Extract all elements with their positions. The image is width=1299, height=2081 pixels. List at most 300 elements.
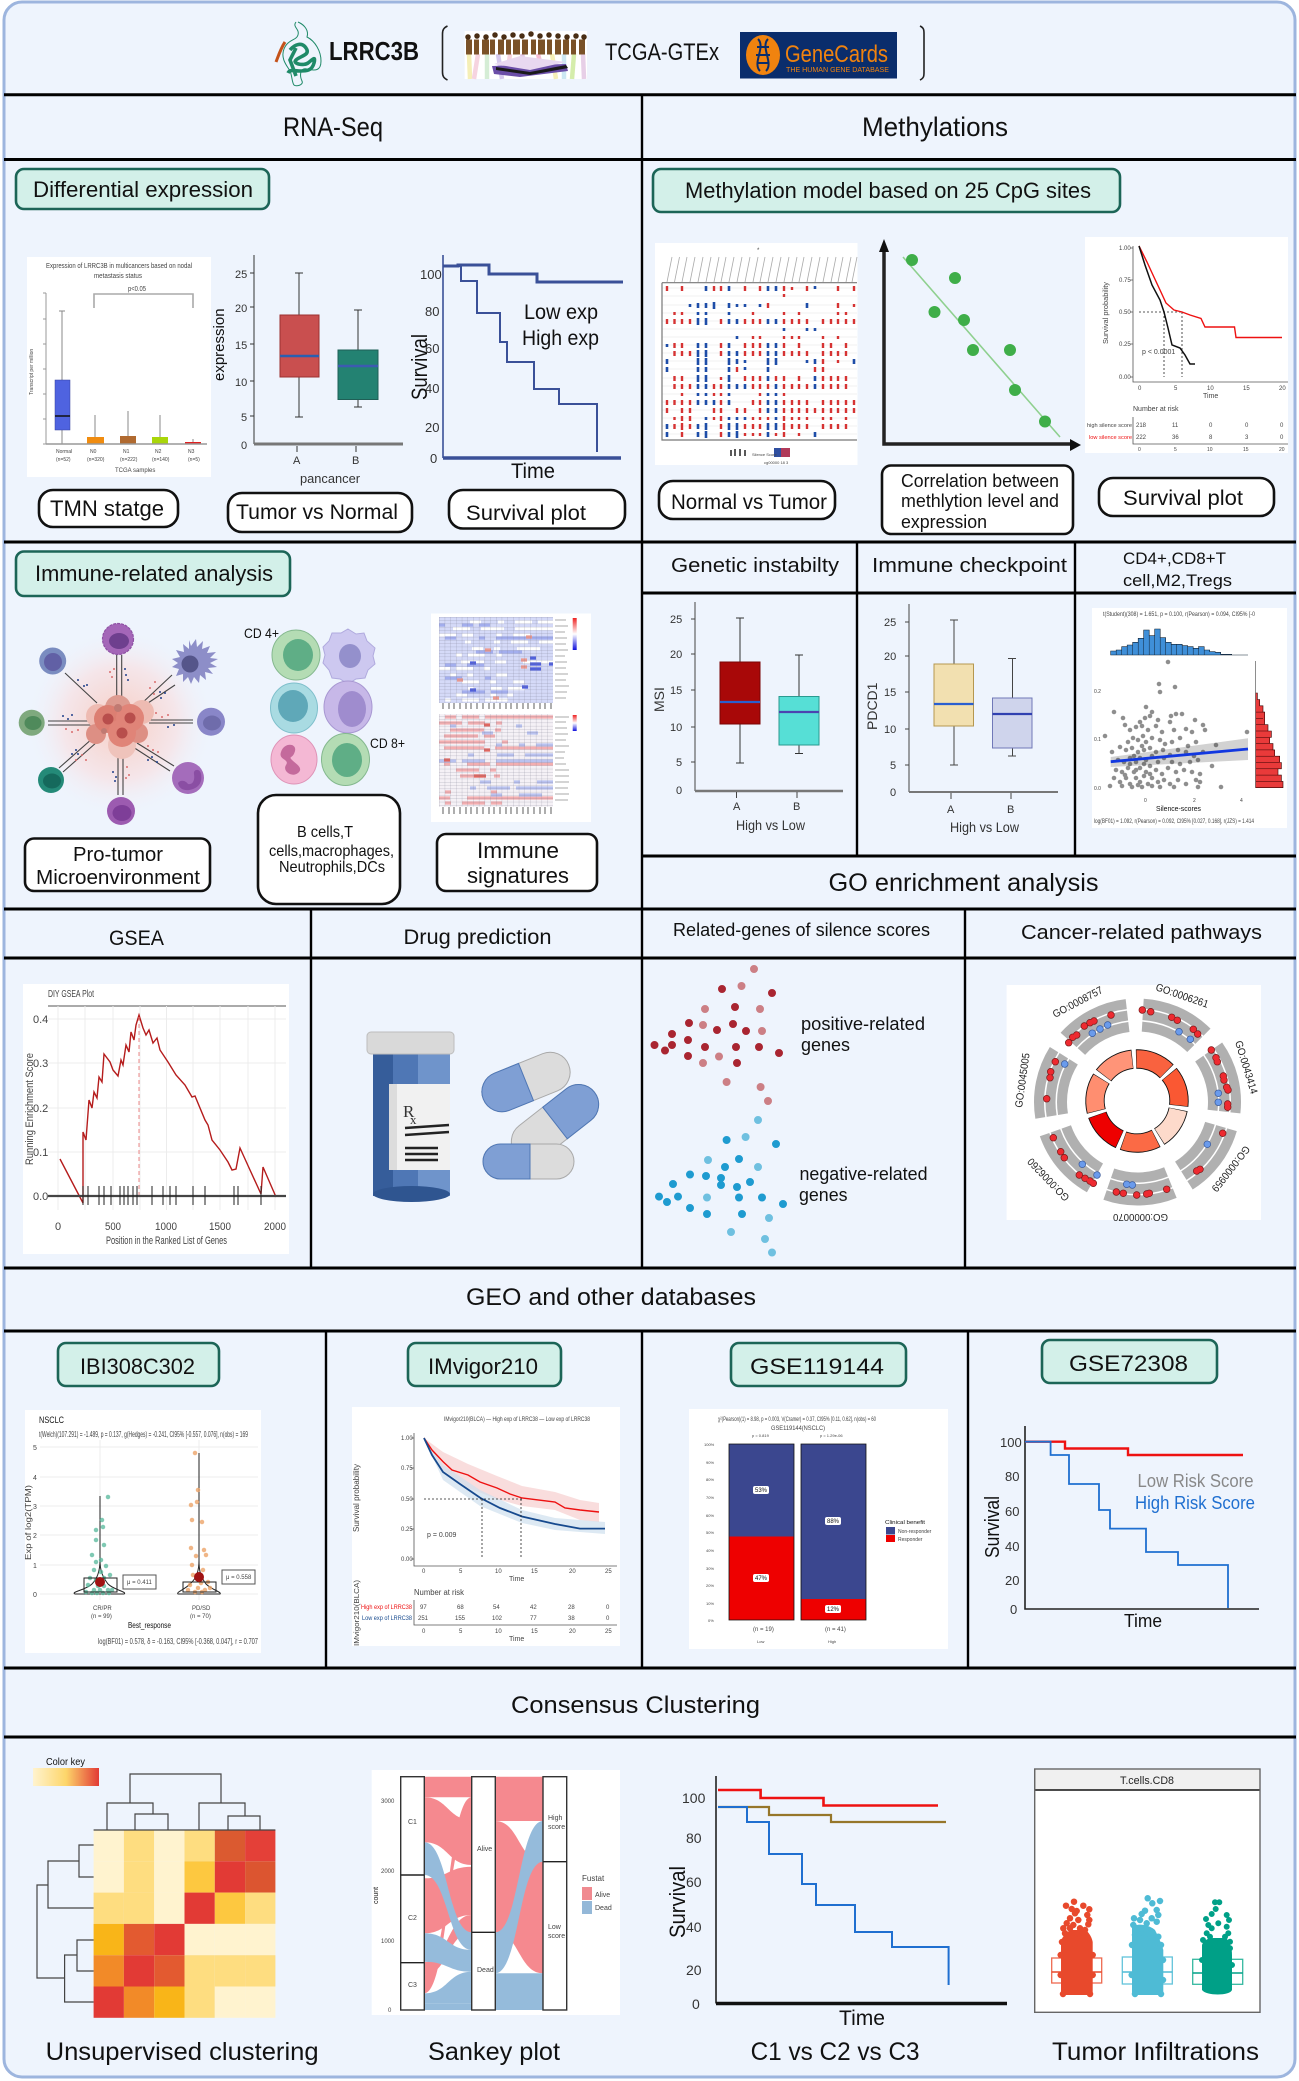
chart: IMvigor210 survival: 54	[493, 1605, 500, 1611]
chart: IMvigor210 survival: 0.75	[401, 1466, 413, 1472]
chart: GSE119144 stacked bars	[689, 1409, 948, 1649]
chart: IMvigor210 survival: 0.25	[401, 1527, 413, 1533]
chart: methylation survival: 15	[1243, 447, 1249, 453]
label: CD 4+: CD 4+	[244, 625, 279, 641]
chart: GSE72308 survival: Time	[1124, 1611, 1162, 1631]
label: Survival plot methylation: Survival plot	[1123, 487, 1243, 510]
left bracket	[442, 26, 448, 80]
chart: Sankey plot: C1	[408, 1819, 417, 1826]
chart: MSI box plot: 25	[670, 614, 682, 626]
chart: silence score scatter: 2	[1193, 798, 1196, 804]
chart: GSE72308 survival: 100	[1000, 1435, 1022, 1450]
badge: GSE72308	[1042, 1340, 1217, 1383]
chart: GSE119144 stacked bars: 90%	[706, 1460, 714, 1465]
chart: IMvigor210 survival: Low exp of LRRC38	[362, 1616, 413, 1622]
chart: PDCD1 box plot: B	[1007, 804, 1014, 816]
chart: MSI box plot: B	[793, 801, 800, 813]
chart: violin plot NSCLC: t(Welch)(107.291) = -1.489, p = 0.137, g(Hedges) = -0.241, CI95% [-0.557, 0.076], n(obs) = 169	[39, 1430, 248, 1439]
chart: Sankey plot: Low	[548, 1924, 562, 1931]
chart: GSE119144 stacked bars: (n = 19)	[753, 1627, 774, 1633]
chart: Sankey plot: score	[548, 1933, 565, 1940]
chart: C1 vs C2 vs C3 survival: 100	[682, 1790, 706, 1806]
satellite cells	[19, 624, 225, 825]
chart: GSE119144 stacked bars: χ²(Pearson)(1) = 8.98, p = 0.003, V(Cramer) = 0.37, CI95% [0.11, 0.62], n(obs) = 60	[718, 1417, 876, 1423]
chart: GSE119144 stacked bars: 70%	[706, 1495, 714, 1500]
label: Immune signatures: Immune	[477, 838, 559, 863]
label: Survival plot: Survival plot	[466, 502, 586, 525]
chart: violin plot NSCLC: log(BF01) = 0.578, δ = -0.163, CI95% [-0.368, 0.047], r = 0.707	[98, 1637, 258, 1646]
chart: GSE119144 stacked bars: 50%	[706, 1530, 714, 1535]
chart: GSEA plot: Running Enrichment Score	[24, 1053, 36, 1165]
chart: MSI box plot: 15	[670, 685, 682, 697]
chart: IMvigor210 survival: IMvigor210(BLCA) — High exp of LRRC38 — Low exp of LRRC38	[444, 1417, 591, 1423]
chart: PDCD1 box plot: 25	[884, 617, 896, 629]
label: Normal vs Tumor: Normal vs Tumor	[671, 491, 827, 514]
chart: IMvigor210 survival: IMvigor210(BLCA)	[354, 1580, 361, 1646]
chart: survival plot RNA-seq: 80	[425, 304, 439, 319]
network: negative-related genes: genes	[799, 1185, 848, 1205]
chart: methylation survival: high silence score	[1087, 423, 1132, 429]
tumor cluster	[86, 695, 154, 759]
chart: GSE119144 stacked bars: 40%	[706, 1548, 714, 1553]
chart: violin plot NSCLC: Exp of log2(TPM)	[24, 1485, 33, 1560]
chart: IMvigor210 survival: 15	[531, 1629, 538, 1635]
chart: methylation heatmap dots	[655, 243, 858, 465]
label: Correlation	[882, 466, 1073, 534]
chart: IMvigor210 survival: Number at risk	[414, 1588, 465, 1597]
heading: CD4 CD8	[1123, 549, 1232, 590]
chart: C1 vs C2 vs C3 survival: Time	[839, 2007, 885, 2030]
icon: pill bottle and capsules: R	[403, 1102, 415, 1121]
chart: PDCD1 box plot: 5	[890, 760, 896, 772]
chart: methylation survival: 0	[1138, 386, 1142, 392]
badge: GSE72308: GSE72308	[1069, 1351, 1188, 1376]
chart: IMvigor210 survival: 251	[418, 1616, 429, 1622]
chart: methylation survival: 20	[1279, 447, 1285, 453]
heading: RNA-Seq: RNA-Seq	[283, 112, 383, 142]
chart: tumor vs normal box plot: pancancer	[300, 471, 361, 486]
chart: GSEA plot: 2000	[264, 1221, 286, 1233]
chart: violin plot NSCLC: (n = 70)	[190, 1614, 211, 1620]
heading: Related-genes: Related-genes of silence scores	[673, 920, 930, 940]
chart: methylation heatmap dots: Silence Score	[752, 452, 777, 457]
network: positive-related genes: positive-related	[801, 1014, 925, 1034]
gene name: LRRC3B	[329, 36, 419, 66]
label: Pro-tumor Microenvironment: Pro-tumor	[73, 844, 163, 866]
badge: Methylation model: Methylation model based on 25 CpG sites	[685, 178, 1091, 203]
heading: CD4 CD8: cell,M2,Tregs	[1123, 571, 1232, 590]
heading: GSEA: GSEA	[109, 927, 164, 950]
chart: GSE119144 stacked bars: 12%	[827, 1607, 840, 1613]
chart: PDCD1 box plot: PDCD1	[864, 682, 880, 730]
chart: GSEA plot: Position in the Ranked List of Genes	[106, 1235, 227, 1247]
label: Unsupervised clustering: Unsupervised clustering	[46, 2038, 319, 2066]
chart: GSE119144 stacked bars: 0%	[708, 1618, 714, 1623]
chart: violin plot NSCLC: (n = 99)	[91, 1614, 112, 1620]
chart: GSE119144 stacked bars: 30%	[706, 1566, 714, 1571]
chart: GSE119144 stacked bars: Clinical benefit	[885, 1520, 926, 1526]
diagram: pro-tumor microenvironment	[19, 624, 225, 825]
chart: methylation survival: 3	[1245, 435, 1249, 441]
chart: Sankey plot: C3	[408, 1982, 417, 1989]
badge: IBI308C302	[58, 1343, 219, 1386]
chart: GSE72308 survival: Survival	[982, 1496, 1004, 1558]
heading: Cancer-related pathways: Cancer-related pathways	[1021, 922, 1262, 944]
chart: PDCD1 box plot: 20	[884, 651, 896, 663]
chart: silence score scatter	[1092, 608, 1287, 828]
chart: survival plot RNA-seq: 60	[425, 341, 439, 356]
chart: tumor vs normal box plot: expression	[211, 308, 228, 381]
chart: IMvigor210 survival: 0.50	[401, 1497, 413, 1503]
chart: GSE119144 stacked bars: Non-responder	[898, 1529, 932, 1535]
chart: survival plot RNA-seq: 0	[430, 451, 437, 466]
chart: TMN stage box plot: p<0.05	[128, 286, 146, 293]
chart: TMN stage box plot	[27, 257, 211, 477]
heading: CD4 CD8: CD4+,CD8+T	[1123, 549, 1226, 568]
chart: Sankey plot: Alive	[595, 1892, 610, 1899]
label: CD 8+: CD 8+	[370, 735, 405, 751]
chart: IMvigor210 survival: 1.00	[401, 1436, 413, 1442]
chart: silence score scatter: log(BF01) = 1.092, r(Pearson) = 0.092, CI95% [0.027, 0.168], r(JZS) = 1.414	[1094, 819, 1255, 825]
chart: survival plot RNA-seq: High exp	[522, 327, 599, 350]
chart: TMN stage box plot: Normal	[56, 449, 72, 455]
chart: IMvigor210 survival: 42	[530, 1605, 537, 1611]
network: positive-related genes	[654, 969, 925, 1101]
chart: MSI box plot: MSI	[651, 687, 667, 712]
chart: methylation survival: Number at risk	[1133, 406, 1179, 413]
chart: methylation survival: 0	[1280, 423, 1284, 429]
chart: PDCD1 box plot: 0	[890, 787, 896, 799]
chart: Sankey plot: 3000	[381, 1799, 395, 1805]
network: negative-related genes: negative-related	[800, 1164, 928, 1184]
chart: IMvigor210 survival: p = 0.009	[427, 1532, 456, 1539]
chart: PDCD1 box plot: 15	[884, 687, 896, 699]
badge: IBI308C302: IBI308C302	[80, 1354, 195, 1379]
label: Survival plot methylation	[1099, 478, 1274, 516]
chart: TMN stage box plot: Transcript per million	[29, 349, 35, 395]
badge: IMvigor210: IMvigor210	[428, 1354, 538, 1379]
header: data sources	[276, 22, 924, 86]
badge: Differential expression	[16, 169, 269, 209]
chart: TMN stage box plot: N3	[188, 449, 195, 455]
chart: IMvigor210 survival: 38	[568, 1616, 575, 1622]
label: B cells T cells: B cells,T	[297, 824, 353, 841]
chart: correlation scatter	[879, 239, 1081, 451]
chart: silence score scatter: 0.0	[1094, 786, 1101, 792]
chart: Sankey plot: Fustat	[582, 1874, 605, 1883]
chart: circular GO plot: GO:0000959	[1209, 1143, 1252, 1194]
label: Correlation: Correlation between	[901, 471, 1059, 491]
chart: violin plot NSCLC: 5	[33, 1445, 37, 1452]
badge: Differential expression: Differential expression	[33, 177, 253, 202]
chart: methylation survival: 0	[1138, 447, 1141, 453]
label: Pro-tumor Microenvironment: Microenvironment	[36, 867, 200, 889]
icon: LRRC3B protein	[276, 22, 321, 86]
label: B cells T cells: cells,macrophages,	[269, 843, 394, 860]
chart: TMN stage box plot: N0	[90, 449, 97, 455]
label: TMN statge: TMN statge	[50, 496, 164, 521]
chart: Sankey plot: Alive	[477, 1846, 492, 1853]
chart: methylation survival: 222	[1136, 435, 1147, 441]
chart: IMvigor210 survival: Time	[509, 1576, 524, 1583]
label: Sankey plot: Sankey plot	[428, 2038, 560, 2066]
chart: survival plot RNA-seq: 40	[425, 381, 439, 396]
chart: C1 vs C2 vs C3 survival: 0	[692, 1996, 700, 2012]
chart: silence score scatter: 0.1	[1094, 737, 1101, 743]
chart: methylation survival	[1085, 237, 1288, 453]
chart: IMvigor210 survival: 97	[420, 1605, 427, 1611]
chart: GSEA plot: 0.3	[33, 1058, 48, 1070]
chart: Sankey plot: Dead	[595, 1905, 612, 1912]
chart: IMvigor210 survival: 20	[569, 1569, 576, 1575]
chart: Sankey plot: 0	[388, 2008, 392, 2014]
heading: Genetic instabilty: Genetic instabilty	[671, 555, 839, 577]
chart: methylation survival: 36	[1172, 435, 1179, 441]
chart: IMvigor210 survival: 77	[530, 1616, 537, 1622]
chart: violin plot NSCLC: μ = 0.411	[127, 1580, 153, 1586]
chart: GSEA plot: 0.2	[33, 1103, 48, 1115]
chart: methylation survival: 5	[1174, 447, 1177, 453]
chart: MSI box plot: 5	[676, 757, 682, 769]
label: Correlation: expression	[901, 512, 987, 532]
chart: MSI box plot: 0	[676, 785, 682, 797]
chart: tumor vs normal box plot: 5	[241, 412, 247, 424]
chart: methylation survival: p < 0.0001	[1142, 349, 1175, 356]
chart: IMvigor210 survival: 10	[495, 1569, 502, 1575]
label: Tumor vs Normal	[228, 493, 412, 532]
chart: IMvigor210 survival: High exp of LRRC38	[361, 1605, 413, 1611]
chart: Sankey plot: High	[548, 1815, 563, 1822]
chart: GSE119144 stacked bars: (n = 41)	[825, 1627, 846, 1633]
chart: C1 vs C2 vs C3 survival: 60	[686, 1874, 702, 1890]
chart: silence score scatter: 4	[1240, 798, 1243, 804]
chart: tumor vs normal box plot: 20	[235, 303, 247, 315]
chart: survival plot RNA-seq: 100	[420, 267, 442, 282]
chart: GSEA plot: 500	[105, 1221, 121, 1233]
chart: GSEA plot: 1500	[209, 1221, 231, 1233]
chart: immune signatures heatmaps	[431, 614, 591, 822]
chart: IMvigor210 survival	[352, 1407, 620, 1646]
chart: methylation survival: 11	[1172, 423, 1179, 429]
chart: methylation heatmap dots: *	[757, 248, 760, 254]
chart: methylation survival: 0.50	[1119, 310, 1131, 316]
chart: silence score scatter: 0	[1144, 798, 1147, 804]
chart: GSE119144 stacked bars: GSE119144(NSCLC)	[771, 1426, 825, 1432]
chart: violin plot NSCLC: PD/SD	[192, 1606, 211, 1612]
chart: GSE119144 stacked bars: Low	[757, 1639, 764, 1644]
chart: silence score scatter: Silence-scores	[1156, 806, 1201, 813]
chart: tumor vs normal box plot: 15	[235, 340, 247, 352]
badge: Immune-related analysis	[16, 552, 290, 596]
chart: T cells CD8 infiltration: T.cells.CD8	[1120, 1775, 1174, 1787]
chart: IMvigor210 survival: Survival probability	[352, 1464, 361, 1532]
icon: pill bottle and capsules: x	[410, 1112, 417, 1127]
icon: pill bottle and capsules	[367, 1032, 607, 1202]
badge: Methylation model	[653, 169, 1120, 212]
chart: violin plot NSCLC: 2	[33, 1533, 37, 1540]
chart: IMvigor210 survival: 0	[606, 1605, 610, 1611]
chart: GSE119144 stacked bars: p = 0.819	[752, 1433, 770, 1438]
chart: tumor vs normal box plot: A	[293, 455, 301, 467]
chart: methylation survival: 0	[1245, 423, 1249, 429]
chart: GSEA plot: 0.0	[33, 1191, 48, 1203]
chart: GSE119144 stacked bars: 53%	[755, 1488, 768, 1494]
chart: TMN stage box plot: (n=52)	[56, 457, 71, 463]
chart: violin plot NSCLC: 4	[33, 1475, 37, 1482]
chart: circular GO plot	[998, 963, 1277, 1241]
image: TCGA	[465, 31, 587, 79]
chart: tumor vs normal box plot	[211, 255, 403, 486]
chart: clustering heatmap	[33, 1757, 275, 2018]
chart: Sankey plot: Dead	[477, 1967, 494, 1974]
chart: survival plot RNA-seq: Low exp	[524, 301, 598, 324]
label: Immune signatures	[437, 834, 597, 891]
chart: GSEA plot: 0.1	[33, 1147, 48, 1159]
chart: circular GO plot: GO:0006260	[1025, 1155, 1072, 1203]
chart: TMN stage box plot: metastasis status	[94, 273, 142, 280]
chart: violin plot NSCLC	[24, 1410, 261, 1653]
chart: methylation survival: 0	[1280, 435, 1284, 441]
chart: C1 vs C2 vs C3 survival: 40	[686, 1919, 702, 1935]
chart: methylation survival: 218	[1136, 423, 1147, 429]
chart: violin plot NSCLC: Best_response	[128, 1621, 171, 1630]
chart: tumor vs normal box plot: 10	[235, 377, 247, 389]
chart: IMvigor210 survival: 10	[495, 1629, 502, 1635]
chart: TMN stage box plot: TCGA samples	[115, 468, 155, 474]
chart: tumor vs normal box plot: 0	[241, 440, 247, 452]
chart: Sankey plot: 2000	[381, 1869, 395, 1875]
label: Tumor Infiltrations: Tumor Infiltrations	[1052, 2038, 1259, 2066]
chart: C1 vs C2 vs C3 survival	[665, 1776, 1007, 2030]
chart: methylation survival: Survival probability	[1103, 281, 1110, 344]
chart: IMvigor210 survival: 0.00	[401, 1557, 413, 1563]
chart: methylation survival: 10	[1207, 447, 1213, 453]
chart: PDCD1 box plot: A	[947, 804, 955, 816]
chart: circular GO plot: GO:0008757	[1051, 984, 1105, 1021]
network: positive-related genes: genes	[801, 1035, 850, 1055]
label: C1 vs C2 vs C3: C1 vs C2 vs C3	[751, 2038, 920, 2066]
chart: circular GO plot: GO:0000070	[1113, 1211, 1168, 1223]
chart: methylation survival: 5	[1174, 386, 1178, 392]
network: negative-related genes	[659, 1120, 928, 1252]
chart: violin plot NSCLC: CR/PR	[93, 1606, 112, 1612]
chart: GSE119144 stacked bars: 60%	[706, 1513, 714, 1518]
chart: GSE72308 survival: 0	[1010, 1602, 1017, 1617]
icon group: immune cells	[244, 625, 405, 786]
chart: T cells CD8 infiltration	[1035, 1769, 1260, 2012]
chart: GSEA plot: DIY GSEA Plot	[48, 989, 94, 1000]
chart: TMN stage box plot: (n=222)	[120, 457, 138, 463]
chart: TMN stage box plot: N2	[155, 449, 162, 455]
chart: GSE119144 stacked bars: 100%	[704, 1442, 715, 1447]
label: B cells T cells: Neutrophils,DCs	[279, 859, 385, 876]
chart: clustering heatmap: Color key	[46, 1757, 85, 1768]
chart: PDCD1 box plot: High vs Low	[950, 819, 1020, 835]
chart: PDCD1 box plot: 10	[884, 724, 896, 736]
chart: MSI box plot: A	[733, 801, 741, 813]
chart: GSE72308 survival: High Risk Score	[1135, 1493, 1255, 1513]
chart: MSI box plot: 20	[670, 649, 682, 661]
label: Immune signatures: signatures	[467, 863, 569, 888]
chart: tumor vs normal box plot: B	[352, 455, 359, 467]
chart: TMN stage box plot: N1	[123, 449, 130, 455]
heading: Drug prediction: Drug prediction	[404, 926, 552, 949]
chart: IMvigor210 survival: 28	[568, 1605, 575, 1611]
chart: IMvigor210 survival: 5	[459, 1629, 463, 1635]
heading: Methylations: Methylations	[862, 112, 1008, 142]
logo: GeneCards	[740, 32, 897, 78]
chart: GSE119144 stacked bars: 88%	[827, 1519, 840, 1525]
logo: GeneCards: GeneCards	[785, 41, 888, 68]
chart: circular GO plot: GO:0006261	[1154, 981, 1210, 1011]
chart: Sankey plot: count	[373, 1887, 380, 1904]
chart: violin plot NSCLC: NSCLC	[39, 1415, 64, 1425]
logo: GeneCards: THE HUMAN GENE DATABASE	[786, 67, 889, 74]
heading: Consensus Clustering: Consensus Clustering	[511, 1692, 760, 1719]
chart: tumor vs normal box plot: 25	[235, 269, 247, 281]
chart: GSE119144 stacked bars: p = 1.29e-06	[820, 1433, 843, 1438]
chart: IMvigor210 survival: 0	[422, 1629, 426, 1635]
chart: GSE119144 stacked bars: 10%	[706, 1601, 714, 1606]
chart: GSE119144 stacked bars: High	[828, 1639, 836, 1644]
chart: Sankey plot: score	[548, 1824, 565, 1831]
chart: MSI box plot	[651, 602, 843, 833]
chart: methylation survival: low silence score	[1089, 435, 1132, 441]
chart: MSI box plot: 10	[670, 722, 682, 734]
chart: circular GO plot: GO:0045005	[1013, 1052, 1033, 1108]
chart: IMvigor210 survival: 0	[606, 1616, 610, 1622]
label: TMN statge	[39, 490, 178, 527]
chart: survival plot RNA-seq: Time	[511, 460, 555, 483]
chart: GSEA plot: 1000	[155, 1221, 177, 1233]
chart: GSEA plot: 0.4	[33, 1014, 48, 1026]
chart: IMvigor210 survival: 155	[455, 1616, 466, 1622]
chart: methylation survival: 0.75	[1119, 278, 1131, 284]
chart: methylation survival: 15	[1243, 386, 1250, 392]
chart: GSEA plot: 0	[55, 1221, 61, 1233]
chart: IMvigor210 survival: 102	[492, 1616, 503, 1622]
chart: silence score scatter: 0.2	[1094, 689, 1101, 695]
badge: Immune-related analysis: Immune-related analysis	[35, 561, 273, 586]
chart: violin plot NSCLC: μ = 0.558	[226, 1575, 252, 1581]
chart: C1 vs C2 vs C3 survival: Survival	[665, 1866, 690, 1938]
chart: IMvigor210 survival: 20	[569, 1629, 576, 1635]
chart: TMN stage box plot: (n=140)	[152, 457, 170, 463]
badge: IMvigor210	[408, 1343, 561, 1386]
chart: C1 vs C2 vs C3 survival: 80	[686, 1830, 702, 1846]
chart: methylation survival: Time	[1203, 393, 1218, 400]
chart: IMvigor210 survival: 5	[459, 1569, 463, 1575]
chart: survival plot RNA-seq	[407, 255, 623, 483]
chart: violin plot NSCLC: 3	[33, 1504, 37, 1511]
dataset name: TCGA-GTEx	[605, 39, 719, 66]
chart: violin plot NSCLC: 0	[33, 1592, 37, 1599]
chart: Sankey plot	[372, 1770, 620, 2015]
chart: Sankey plot: 1000	[381, 1939, 395, 1945]
chart: GSE119144 stacked bars: 20%	[706, 1583, 714, 1588]
chart: methylation survival: 1.00	[1119, 246, 1131, 252]
badge: GSE119144: GSE119144	[750, 1354, 884, 1379]
chart: PDCD1 box plot	[864, 604, 1058, 835]
chart: TMN stage box plot: (n=320)	[87, 457, 105, 463]
chart: GSE119144 stacked bars: 80%	[706, 1477, 714, 1482]
chart: GSE72308 survival: 40	[1005, 1539, 1019, 1554]
right bracket	[920, 26, 924, 80]
label: Normal vs Tumor	[659, 481, 835, 519]
heading: Immune checkpoint: Immune checkpoint	[872, 555, 1067, 577]
chart: violin plot NSCLC: 1	[33, 1563, 37, 1570]
chart: survival plot RNA-seq: Survival	[407, 334, 432, 400]
